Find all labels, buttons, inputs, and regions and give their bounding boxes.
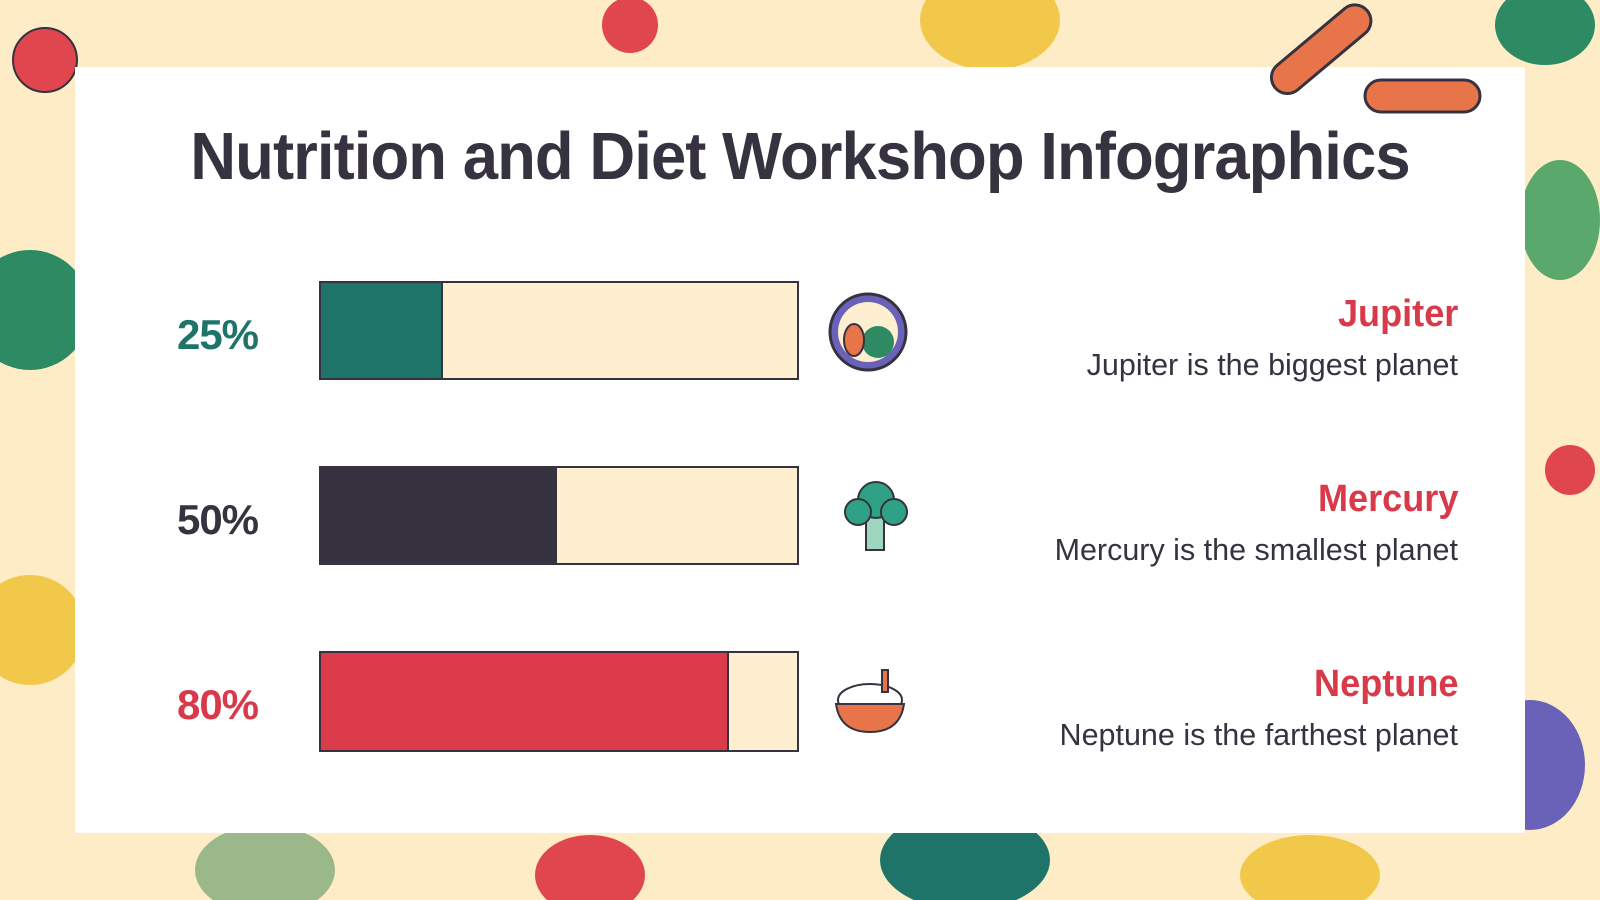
- text: Jupiter: Jupiter is the biggest planet: [1087, 348, 1458, 382]
- text: Mercury: Mercury: [1318, 478, 1458, 520]
- text: Mercury: [1055, 478, 1458, 567]
- row 2: 50%: [177, 466, 799, 565]
- panel: main white card: [75, 67, 1525, 833]
- text: Neptune: [1060, 663, 1458, 752]
- bar 50: [319, 466, 799, 565]
- text: Jupiter: [1087, 293, 1458, 382]
- text: Mercury: Mercury is the smallest planet: [1055, 533, 1458, 567]
- percent label 25: 25%: [177, 311, 258, 358]
- icon: plate: [828, 292, 908, 372]
- row 1: 25%: [177, 281, 799, 380]
- text: Neptune: Neptune is the farthest planet: [1060, 718, 1458, 752]
- icon: rice bowl: [834, 669, 906, 733]
- text: Neptune: Neptune: [1314, 663, 1458, 705]
- icon: carrots top right: [1270, 3, 1482, 114]
- percent label 50: 50%: [177, 496, 258, 543]
- bar 80: [319, 651, 799, 752]
- row 3: 80%: [177, 651, 799, 752]
- title: Nutrition and Diet Workshop Infographics: [190, 119, 1410, 194]
- bar 25: [319, 281, 799, 380]
- percent label 80: 80%: [177, 681, 258, 728]
- icon: broccoli: [844, 481, 908, 551]
- text: Jupiter: Jupiter: [1338, 293, 1458, 335]
